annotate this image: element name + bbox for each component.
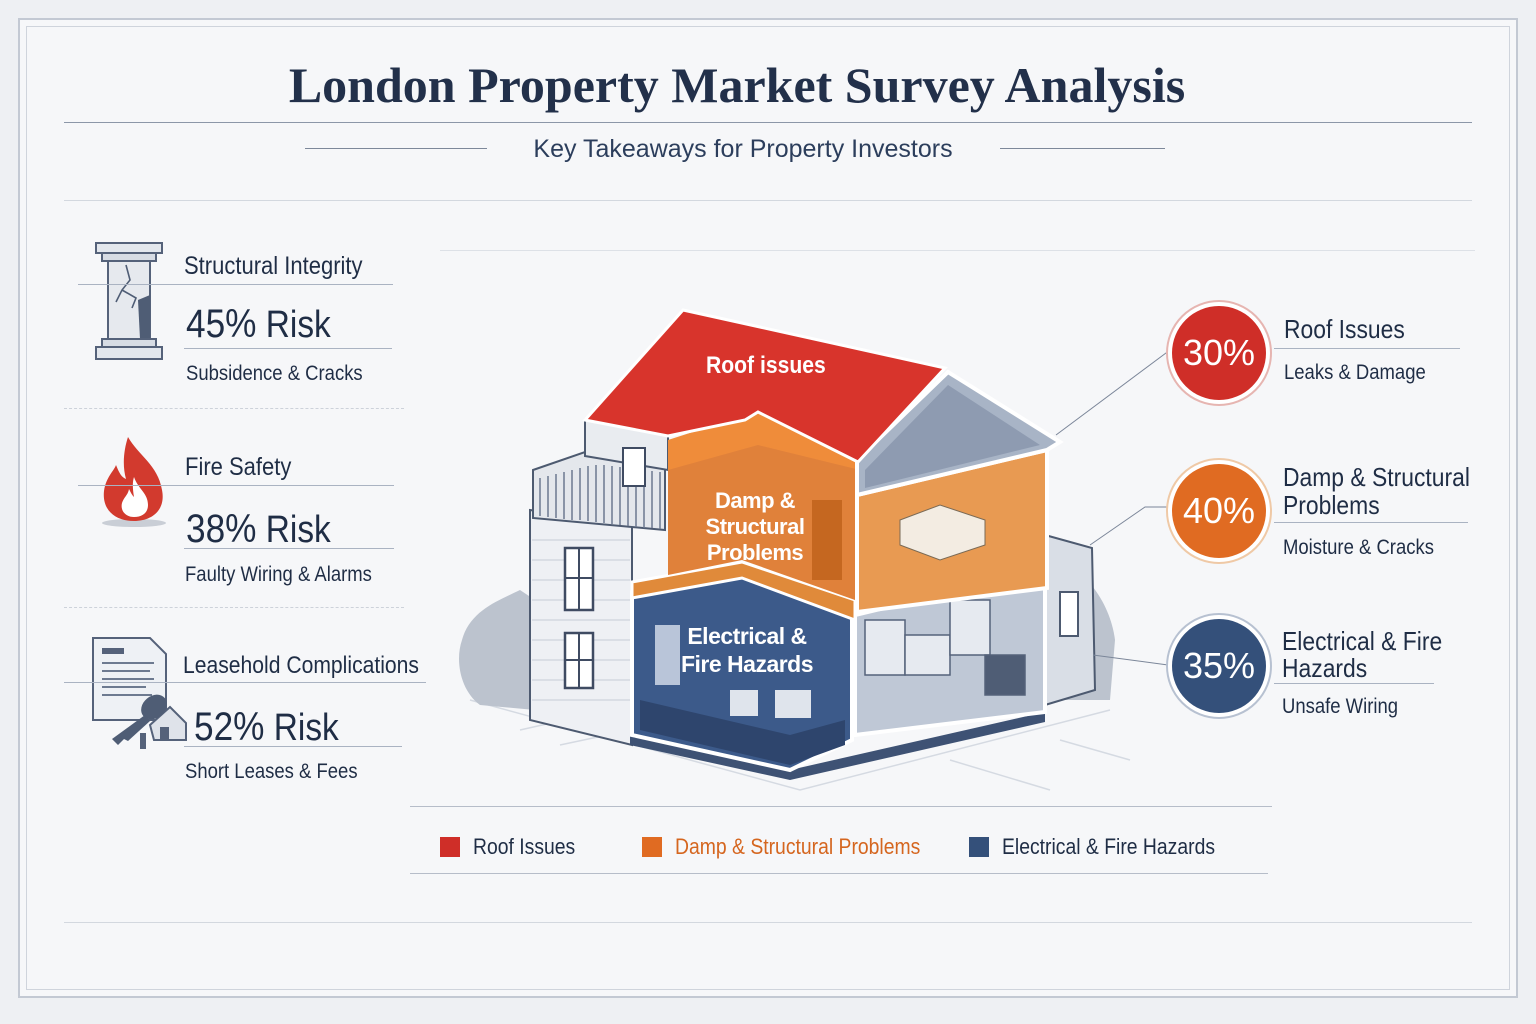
house label: electrical: Fire Hazards [681, 651, 813, 677]
callout: electrical 35%: Electrical & Fire [1282, 626, 1442, 656]
callout: roof 30% [1166, 300, 1460, 406]
panel: leasehold [64, 637, 426, 783]
attic orange band [668, 412, 860, 470]
callout: electrical 35%: Unsafe Wiring [1282, 695, 1398, 718]
callout: damp 40%: Damp & Structural [1283, 462, 1470, 492]
left tower [530, 510, 632, 745]
callout: roof 30%: Roof Issues [1284, 314, 1405, 344]
balcony [533, 452, 665, 530]
right lower room [855, 570, 1045, 735]
callout: damp 40%: Problems [1283, 490, 1380, 520]
red roof [585, 310, 945, 462]
text: subsidence: Subsidence & Cracks [186, 362, 363, 385]
title: London Property Market Survey Analysis [289, 57, 1185, 113]
blue room [632, 572, 852, 770]
icon: document and key [92, 637, 187, 749]
stat: 45% risk: 45% Risk [186, 302, 331, 346]
icon: cracked pillar [95, 242, 163, 360]
callout: damp 40%: Moisture & Cracks [1283, 536, 1434, 559]
house label: damp [706, 488, 804, 565]
legend: Damp & Structural Problems [675, 834, 920, 859]
house label: damp: Structural [706, 514, 804, 539]
legend: Electrical & Fire Hazards [1002, 834, 1215, 859]
heading: fire safety: Fire Safety [185, 453, 291, 481]
panel: fire safety [78, 437, 394, 586]
house label: damp: Damp & [715, 488, 795, 513]
ground grid [470, 670, 1130, 790]
legend [410, 806, 1272, 874]
stat: 52% risk: 52% Risk [194, 705, 339, 749]
base [630, 712, 1045, 780]
callout: roof 30%: 30% [1183, 332, 1255, 373]
panel: structural integrity [78, 242, 393, 385]
callout: electrical 35% [1166, 613, 1442, 719]
callout: electrical 35%: Hazards [1282, 653, 1367, 683]
subtitle: Key Takeaways for Property Investors [533, 135, 953, 163]
callout: electrical 35%: 35% [1183, 645, 1255, 686]
orange room [668, 435, 855, 600]
bush [459, 590, 535, 710]
right upper room [857, 450, 1047, 612]
heading: structural integrity: Structural Integrity [184, 252, 363, 280]
orange floor [632, 562, 855, 620]
house label: roof issues: Roof issues [706, 352, 826, 379]
house label: electrical: Electrical & [687, 623, 807, 649]
house label: damp: Problems [707, 540, 803, 565]
text: short leases: Short Leases & Fees [185, 760, 358, 783]
right annex [1045, 535, 1095, 705]
icon: flame [102, 437, 166, 527]
callout: damp 40%: 40% [1183, 490, 1255, 531]
heading: leasehold complications: Leasehold Complications [183, 652, 419, 679]
callout: damp 40% [1166, 458, 1470, 564]
house label: electrical [681, 623, 813, 677]
upper tower [585, 420, 668, 470]
stat: 38% risk: 38% Risk [186, 507, 331, 551]
legend: Roof Issues [473, 834, 575, 859]
gable [857, 372, 1060, 495]
text: faulty wiring: Faulty Wiring & Alarms [185, 563, 372, 586]
callout: roof 30%: Leaks & Damage [1284, 361, 1426, 384]
